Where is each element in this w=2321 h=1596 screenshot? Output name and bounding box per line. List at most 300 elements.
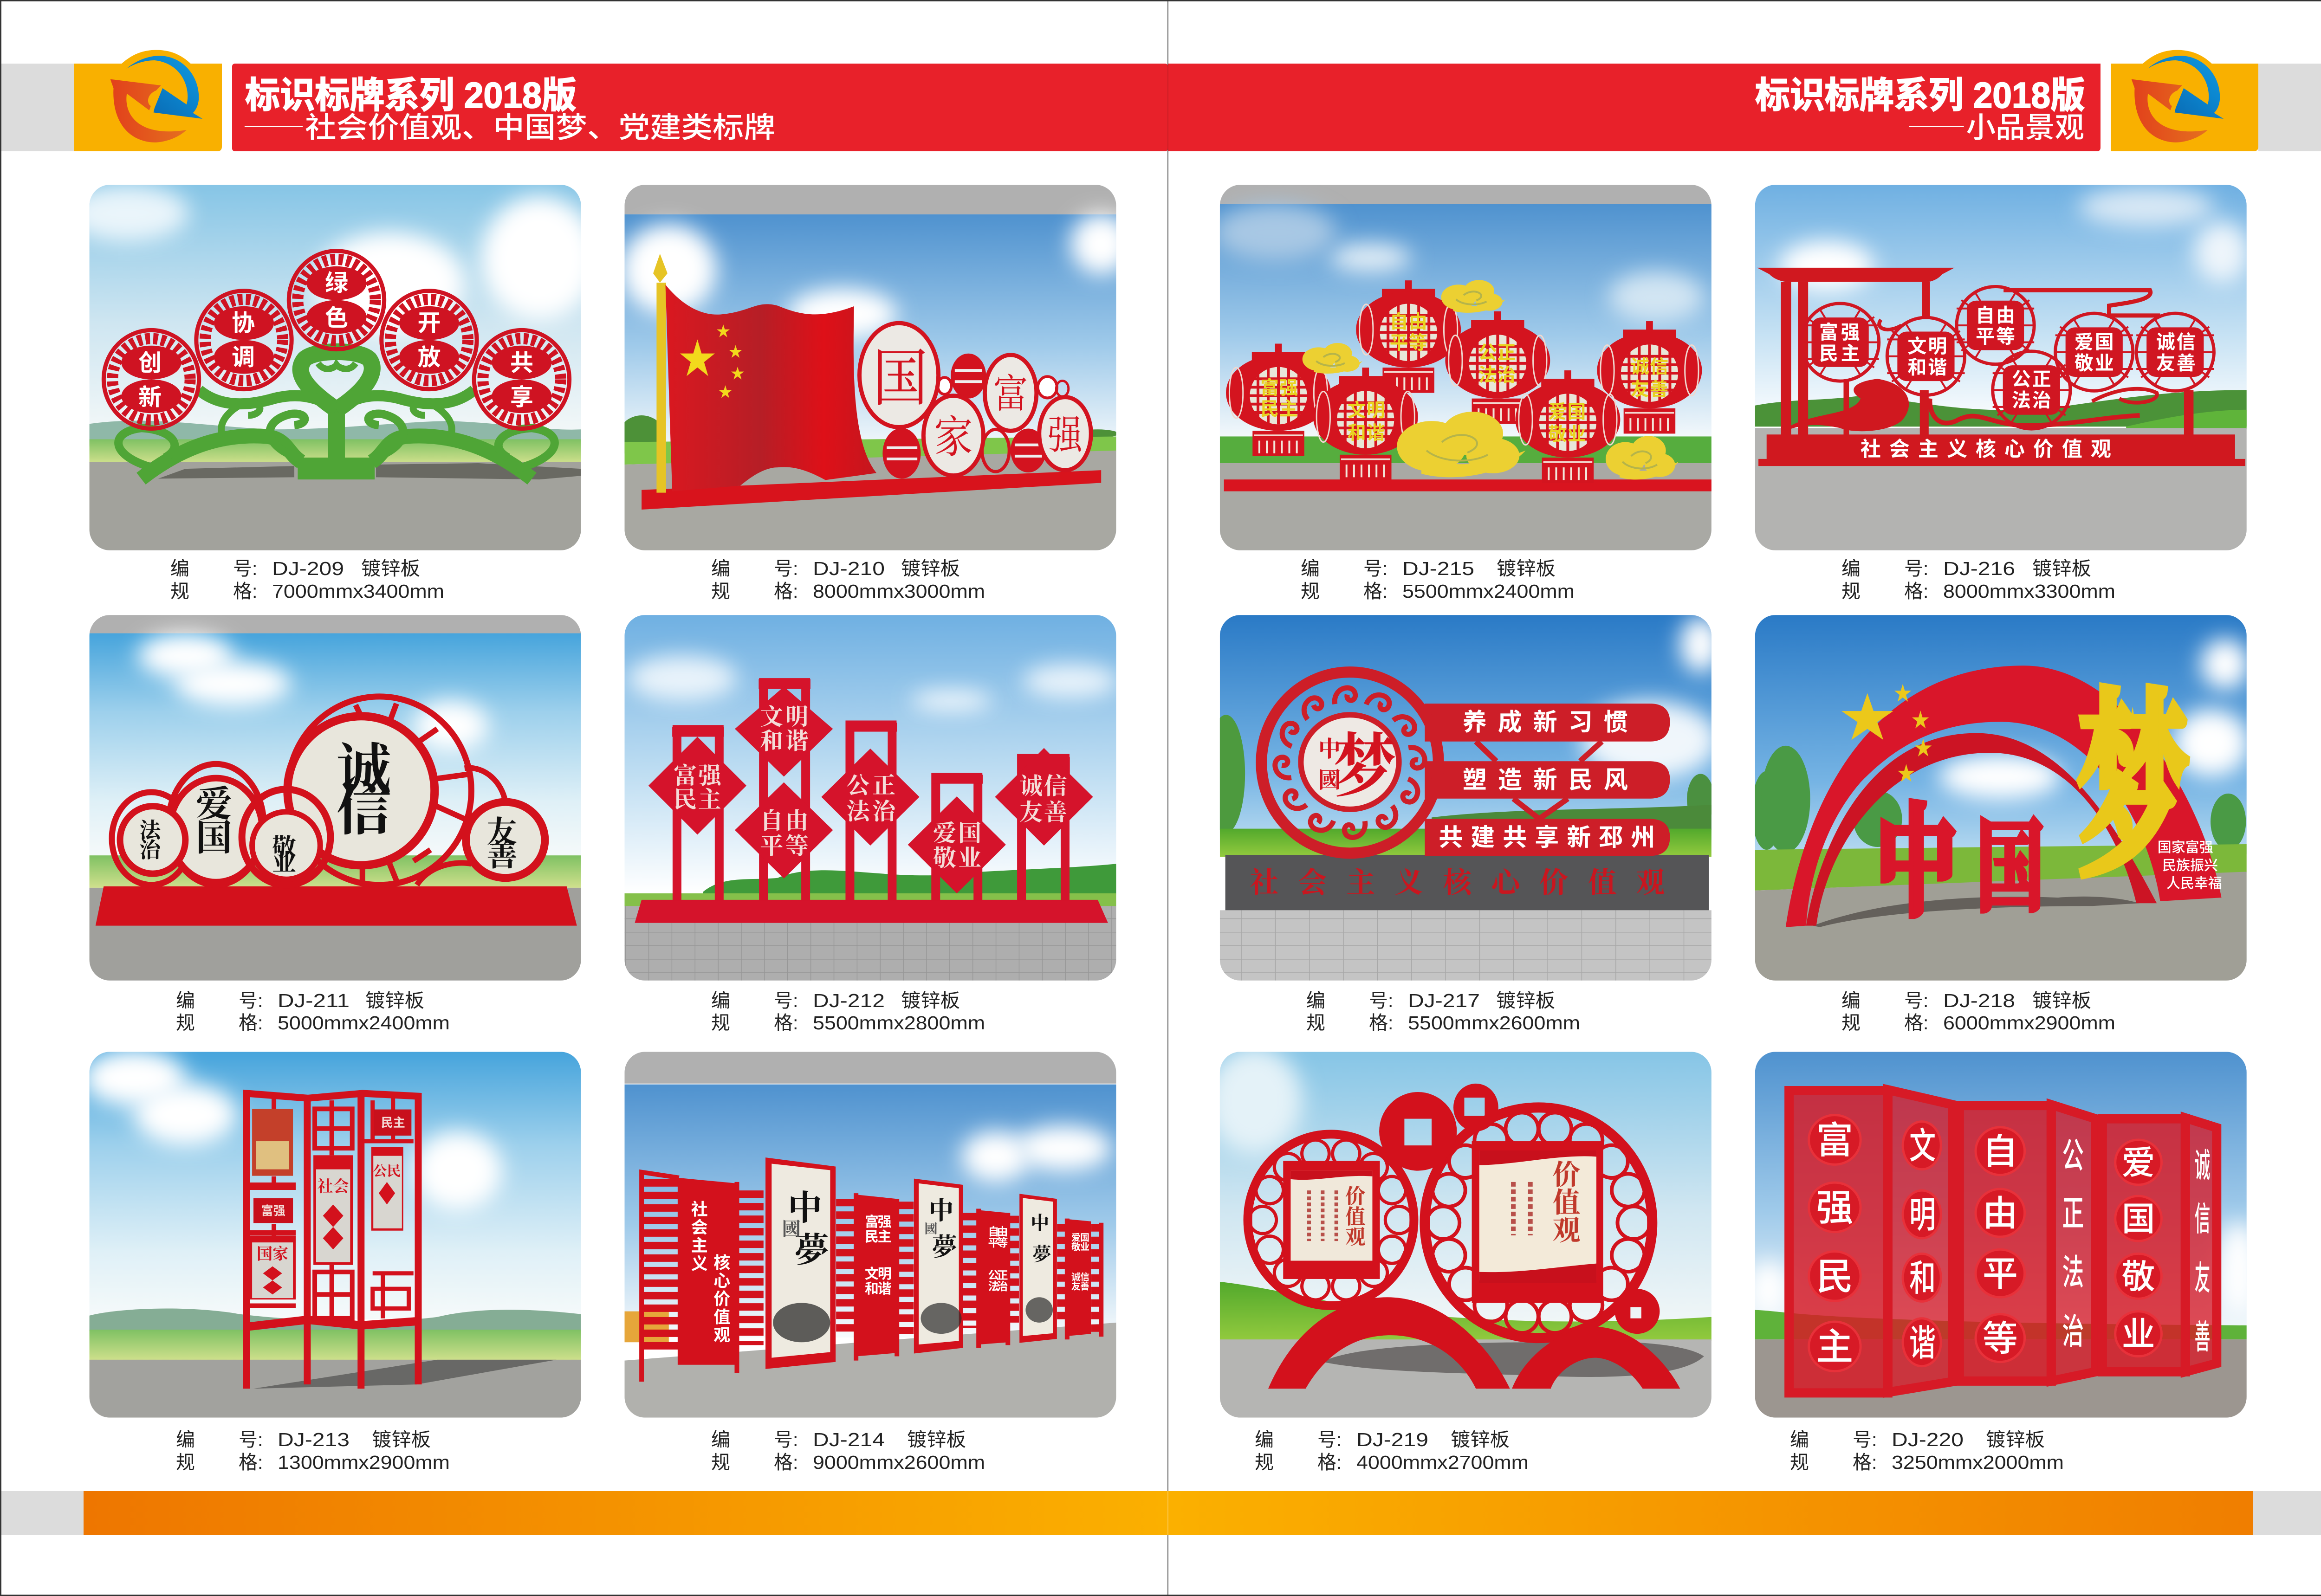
caption DJ-211 — [176, 990, 450, 1034]
diamond characters: 民 — [674, 781, 697, 814]
gate frame — [1757, 268, 2193, 435]
caption DJ-216: 编 — [1841, 558, 1861, 579]
caption DJ-213: 镀锌板 — [372, 1429, 431, 1450]
left header band — [1, 50, 1168, 151]
lattice medallions: 自 — [1976, 299, 1995, 327]
caption DJ-212: 5500mmx2800mm — [813, 1012, 985, 1034]
caption DJ-215: 号: — [1363, 558, 1387, 579]
round emblem: 國 — [1318, 762, 1341, 794]
panel: DJ-216 core values gate sign — [1755, 185, 2249, 550]
screen characters — [1816, 1111, 2210, 1371]
sign tile: rich strong: 富强 — [261, 1202, 285, 1219]
diamond characters: 善 — [1044, 794, 1067, 827]
ink scrolls: 國 — [782, 1214, 801, 1241]
round discs: 爱 — [195, 775, 232, 827]
medallions — [104, 251, 570, 428]
outer arch — [1786, 666, 2222, 927]
inner arch — [1806, 733, 2157, 926]
caption DJ-214: 镀锌板 — [907, 1429, 966, 1450]
round emblem: 中 — [1318, 731, 1341, 763]
caption DJ-220: 规 — [1790, 1452, 1809, 1473]
screen characters: 和 — [1909, 1249, 1936, 1301]
caption DJ-218: 6000mmx2900mm — [1943, 1012, 2115, 1034]
caption DJ-213: 格: — [239, 1452, 263, 1473]
lattice medallions: 诚 — [2156, 326, 2175, 354]
medallions: 绿 — [325, 265, 348, 298]
lattice medallions: 法 — [2012, 384, 2031, 412]
caption DJ-218: 镀锌板 — [2032, 990, 2091, 1011]
red base — [96, 886, 577, 926]
ink scrolls: 中 — [1031, 1208, 1049, 1235]
caption DJ-213: 1300mmx2900mm — [278, 1452, 450, 1473]
panel: DJ-220 six-fold screen — [1748, 1052, 2259, 1418]
plinth slogan: 社会主义核心价值观 — [1250, 859, 1684, 901]
caption DJ-214: 号: — [774, 1429, 798, 1450]
lattice medallions: 主 — [1841, 337, 1860, 365]
caption DJ-217: 镀锌板 — [1496, 990, 1555, 1011]
caption DJ-219: 编 — [1255, 1429, 1274, 1450]
screen characters: 诚 — [2195, 1139, 2210, 1187]
lattice medallions: 正 — [2032, 363, 2051, 391]
panel: DJ-209 green tree sign — [66, 185, 597, 550]
round discs: 信 — [337, 767, 391, 846]
medallions: 协 — [232, 304, 255, 338]
caption DJ-209: 镀锌板 — [361, 558, 420, 579]
lattice medallions: 敬 — [2075, 347, 2094, 375]
caption DJ-219: 规 — [1255, 1452, 1274, 1473]
caption DJ-216: DJ-216 — [1943, 558, 2015, 579]
lanterns: 和 — [1348, 418, 1366, 445]
red base — [1224, 479, 1712, 491]
lanterns: 善 — [1650, 374, 1668, 401]
banner slogans: 明谐 — [875, 1266, 895, 1296]
lanterns: 爱 — [1548, 396, 1567, 423]
caption DJ-215: 格: — [1363, 581, 1387, 602]
screen characters: 法 — [2062, 1244, 2084, 1295]
caption DJ-214: 规 — [711, 1452, 730, 1473]
round emblems: 强 — [1048, 403, 1083, 460]
sign tile: nation: 国家 — [257, 1241, 288, 1264]
lanterns: 明 — [1367, 395, 1385, 422]
flag stars — [680, 324, 744, 398]
caption DJ-213 — [176, 1429, 450, 1473]
caption DJ-218: 规 — [1841, 1012, 1861, 1034]
caption DJ-217: 格: — [1369, 1012, 1393, 1034]
round discs: 国 — [196, 809, 232, 861]
round discs — [120, 716, 545, 885]
caption DJ-218: 格: — [1904, 1012, 1928, 1034]
lattice rings — [112, 697, 506, 885]
red base — [642, 470, 1101, 510]
diamond characters: 和 — [760, 723, 783, 756]
sign tile: citizen: 公民 — [373, 1159, 401, 1180]
golden clouds — [1303, 280, 1679, 479]
screen characters: 富 — [1816, 1111, 1853, 1164]
diamond characters: 谐 — [785, 723, 809, 756]
diamond characters: 文 — [760, 698, 783, 731]
diamond characters: 法 — [847, 793, 872, 826]
arches — [1268, 1297, 1680, 1389]
sign tile: society: 社会 — [318, 1174, 349, 1196]
caption DJ-215: 5500mmx2400mm — [1402, 581, 1575, 602]
caption DJ-216 — [1841, 558, 2115, 602]
lattice medallions: 明 — [1928, 330, 1947, 358]
sign tile: rich strong — [253, 1198, 293, 1223]
panel: DJ-219 coin ring sign — [1207, 1047, 1712, 1418]
diamond characters: 主 — [698, 781, 721, 814]
medallions: 共 — [510, 344, 533, 378]
bar slogans: 共建共享新邳州 — [1439, 818, 1663, 853]
lattice medallions: 强 — [1841, 317, 1860, 344]
red characters: 国 — [1977, 788, 2044, 931]
lanterns: 民 — [1260, 394, 1279, 420]
fret columns — [660, 1179, 1096, 1350]
caption DJ-220: 编 — [1790, 1429, 1809, 1450]
lattice medallions: 谐 — [1928, 352, 1947, 380]
screen characters: 正 — [2062, 1185, 2084, 1236]
banner slogans: 富民 — [862, 1215, 882, 1244]
left poster: 价值观 — [1341, 1185, 1370, 1247]
caption DJ-213: 号: — [239, 1429, 263, 1450]
sign tile: nation — [250, 1235, 296, 1299]
caption DJ-216: 格: — [1904, 581, 1928, 602]
poster — [252, 1109, 293, 1176]
sign tile: society — [313, 1155, 353, 1265]
caption DJ-217: DJ-217 — [1408, 990, 1480, 1011]
caption DJ-211: 编 — [176, 990, 195, 1011]
left ring — [1248, 1134, 1414, 1305]
diamond characters: 友 — [1019, 794, 1043, 827]
lanterns: 业 — [1567, 419, 1586, 446]
caption DJ-215: 规 — [1301, 581, 1320, 602]
caption DJ-220: 3250mmx2000mm — [1892, 1452, 2064, 1473]
medallions: 放 — [417, 339, 441, 372]
screen frame — [246, 1093, 418, 1389]
caption DJ-216: 规 — [1841, 581, 1861, 602]
round discs: 善 — [486, 831, 517, 875]
caption DJ-211: DJ-211 — [278, 990, 350, 1011]
diamond characters: 强 — [698, 757, 723, 791]
screen characters: 等 — [1983, 1310, 2018, 1361]
caption DJ-220: 格: — [1853, 1452, 1877, 1473]
banner slogans: 核心价值观 — [710, 1254, 734, 1344]
lattice medallions: 国 — [2095, 326, 2114, 354]
medallions: 新 — [138, 379, 162, 412]
panel: DJ-213 folding screen sign — [83, 1050, 581, 1418]
caption DJ-218 — [1841, 990, 2115, 1034]
caption DJ-219: 格: — [1317, 1452, 1342, 1473]
diamond characters — [674, 698, 1067, 873]
lanterns: 自 — [1390, 306, 1408, 333]
round discs: 业 — [272, 843, 296, 878]
caption DJ-210: 格: — [774, 581, 798, 602]
caption DJ-212: 号: — [774, 990, 798, 1011]
caption DJ-209: 号: — [233, 558, 257, 579]
caption DJ-209: 规 — [170, 581, 189, 602]
medallions: 创 — [138, 344, 162, 378]
lanterns: 谐 — [1367, 418, 1385, 445]
lanterns: 治 — [1497, 360, 1516, 387]
diamond characters: 公 — [847, 767, 870, 801]
medallions: 开 — [417, 304, 441, 338]
medallions: 调 — [232, 339, 255, 372]
caption DJ-212: 镀锌板 — [901, 990, 960, 1011]
lanterns: 信 — [1650, 351, 1668, 378]
red banners — [678, 1178, 1091, 1365]
screen characters: 公 — [2062, 1128, 2084, 1179]
caption DJ-220: 镀锌板 — [1986, 1429, 2045, 1450]
screen characters: 平 — [1983, 1245, 2018, 1296]
lanterns: 国 — [1567, 396, 1586, 423]
diamond characters: 等 — [785, 827, 809, 861]
lanterns: 正 — [1497, 337, 1516, 364]
lattice medallions: 民 — [1819, 337, 1838, 365]
round discs: 治 — [139, 834, 162, 864]
bar slogans: 塑造新民风 — [1463, 760, 1639, 795]
banner slogans: 自平 — [985, 1226, 1002, 1248]
lanterns: 强 — [1279, 373, 1298, 400]
diamonds — [648, 687, 1093, 893]
red characters: 中 — [1876, 766, 1957, 939]
shadow — [158, 463, 581, 479]
caption DJ-216: 8000mmx3300mm — [1943, 581, 2115, 602]
screen characters: 文 — [1909, 1117, 1936, 1169]
screen characters: 自 — [1983, 1123, 2018, 1174]
lanterns: 富 — [1260, 373, 1279, 400]
diamond characters: 业 — [958, 840, 981, 873]
screen characters: 由 — [1983, 1185, 2018, 1236]
screen characters: 明 — [1909, 1186, 1936, 1238]
ink scrolls: 中 — [788, 1181, 822, 1230]
panel: DJ-214 banner row sign — [624, 1052, 1116, 1418]
caption DJ-209: DJ-209 — [272, 558, 344, 579]
ink scrolls: 夢 — [932, 1228, 957, 1263]
screen characters: 民 — [1816, 1247, 1853, 1301]
lanterns: 敬 — [1548, 419, 1567, 446]
lattice medallions: 公 — [2012, 363, 2031, 391]
left poster — [1283, 1161, 1380, 1279]
column caps — [672, 679, 1070, 788]
caption DJ-219: DJ-219 — [1356, 1429, 1428, 1450]
sign tile: democracy — [374, 1110, 411, 1136]
screen characters: 业 — [2122, 1307, 2155, 1356]
diamond characters: 诚 — [1019, 768, 1043, 801]
caption DJ-211: 5000mmx2400mm — [278, 1012, 450, 1034]
caption DJ-218: 编 — [1841, 990, 1861, 1011]
lattice medallions: 治 — [2032, 384, 2051, 412]
banner slogans: 文和 — [862, 1266, 882, 1296]
banner slogans: 正治 — [994, 1269, 1011, 1292]
header subtitle right: ——小品景观 — [1907, 104, 2084, 146]
posts — [642, 1172, 1101, 1382]
right ring — [1425, 1107, 1652, 1338]
ink scrolls: 中 — [929, 1191, 954, 1227]
caption DJ-213: 编 — [176, 1429, 195, 1450]
lanterns: 主 — [1279, 394, 1298, 420]
right header band — [1168, 50, 2321, 151]
wave swoosh — [1789, 379, 1909, 431]
footer band — [1, 1491, 2321, 1535]
caption DJ-211: 格: — [239, 1012, 263, 1034]
bars — [1425, 704, 1670, 856]
caption DJ-209: 编 — [170, 558, 189, 579]
diamond characters: 正 — [872, 767, 895, 801]
diamond characters: 明 — [785, 698, 809, 731]
lattice medallions: 业 — [2095, 347, 2114, 375]
ink scrolls: 夢 — [1033, 1240, 1051, 1266]
caption DJ-219: 号: — [1317, 1429, 1342, 1450]
banner slogans: 国业 — [1078, 1233, 1091, 1251]
caption DJ-210: DJ-210 — [813, 558, 885, 579]
bar slogans: 养成新习惯 — [1463, 703, 1639, 737]
yellow dream character: 梦 — [2076, 628, 2190, 914]
screen characters: 敬 — [2122, 1249, 2155, 1298]
diamond characters: 平 — [760, 827, 783, 861]
lattice medallions: 平 — [1976, 321, 1995, 349]
caption DJ-209 — [170, 558, 444, 602]
round discs: 诚 — [337, 725, 391, 804]
diamond characters: 敬 — [933, 840, 956, 873]
green tree frame — [118, 352, 555, 479]
plate text — [2158, 836, 2222, 892]
column frames — [677, 683, 1065, 900]
screen frames — [1789, 1090, 2217, 1393]
shadow — [1323, 1341, 1704, 1377]
caption DJ-214 — [711, 1429, 985, 1473]
lanterns: 法 — [1478, 360, 1497, 387]
banner slogans: 由等 — [994, 1226, 1011, 1248]
round emblems: 家 — [934, 401, 973, 465]
scroll ornaments — [1879, 290, 2160, 426]
header title right: 标识标牌系列 2018版 — [1755, 75, 2085, 116]
lanterns — [1226, 280, 1702, 483]
logo: left — [110, 50, 202, 142]
caption DJ-217 — [1306, 990, 1580, 1034]
lanterns: 文 — [1348, 395, 1366, 422]
lattice medallions: 文 — [1907, 330, 1926, 358]
screen characters: 善 — [2195, 1311, 2210, 1359]
screen characters: 强 — [1816, 1178, 1853, 1232]
banner slogans — [687, 1200, 1091, 1344]
lanterns: 由 — [1409, 306, 1427, 333]
caption DJ-210: 编 — [711, 558, 730, 579]
caption DJ-214: DJ-214 — [813, 1429, 885, 1450]
ink scrolls: 國 — [924, 1219, 938, 1237]
screen characters: 爱 — [2122, 1135, 2155, 1184]
plate text: 国家富强 — [2158, 836, 2213, 856]
caption DJ-217: 号: — [1369, 990, 1393, 1011]
lattice medallions: 和 — [1907, 352, 1926, 380]
lattice medallions: 富 — [1819, 317, 1838, 344]
diamond characters: 富 — [674, 757, 697, 791]
caption DJ-218: 号: — [1904, 990, 1928, 1011]
caption DJ-216: 镀锌板 — [2032, 558, 2091, 579]
caption DJ-212: 规 — [711, 1012, 730, 1034]
medallions: 享 — [510, 379, 533, 412]
diamond characters: 由 — [785, 802, 809, 835]
caption DJ-219 — [1255, 1429, 1529, 1473]
round emblem — [1261, 672, 1439, 853]
screen characters: 主 — [1816, 1317, 1853, 1371]
flag — [665, 284, 876, 491]
shadow — [253, 1360, 557, 1389]
lanterns: 诚 — [1631, 351, 1649, 378]
sign tile: democracy: 民主 — [381, 1113, 405, 1131]
caption DJ-218: DJ-218 — [1943, 990, 2015, 1011]
dark plinth — [1225, 855, 1709, 910]
logo: right — [2132, 50, 2224, 142]
stars — [1841, 684, 1932, 782]
caption DJ-217: 编 — [1306, 990, 1325, 1011]
caption DJ-216: 号: — [1904, 558, 1928, 579]
caption DJ-220: DJ-220 — [1892, 1429, 1964, 1450]
lattice medallions: 由 — [1996, 299, 2015, 327]
bar connectors — [1476, 742, 1602, 819]
caption DJ-209: 格: — [233, 581, 257, 602]
caption DJ-210: 号: — [774, 558, 798, 579]
caption DJ-215 — [1301, 558, 1575, 602]
lanterns: 友 — [1631, 374, 1649, 401]
caption DJ-219: 镀锌板 — [1451, 1429, 1510, 1450]
arch shadow — [1813, 897, 2140, 927]
banner slogans: 信善 — [1078, 1272, 1091, 1291]
round emblems — [859, 323, 1091, 478]
caption DJ-220 — [1790, 1429, 2064, 1473]
red characters — [1876, 766, 2044, 939]
caption DJ-210: 8000mmx3000mm — [813, 581, 985, 602]
lattice medallions: 善 — [2177, 347, 2196, 375]
medallions — [1809, 1115, 2161, 1371]
caption DJ-219: 4000mmx2700mm — [1356, 1452, 1529, 1473]
caption DJ-213: 规 — [176, 1452, 195, 1473]
ink scrolls: 夢 — [795, 1223, 829, 1272]
plate text: 民族振兴 — [2162, 854, 2218, 874]
caption DJ-211: 规 — [176, 1012, 195, 1034]
caption DJ-215: 编 — [1301, 558, 1320, 579]
base slogan: 社会主义核心价值观 — [1861, 432, 2120, 462]
panel: DJ-218 Chinese dream arch — [1751, 615, 2249, 981]
caption DJ-211: 号: — [239, 990, 263, 1011]
round discs: 敬 — [272, 828, 296, 863]
banner slogans: 公法 — [985, 1269, 1002, 1292]
panel: DJ-217 Chinese dream round sign — [1207, 615, 1721, 981]
ink scrolls — [765, 1157, 1057, 1369]
screen characters: 信 — [2195, 1193, 2210, 1241]
caption DJ-210 — [711, 558, 985, 602]
caption DJ-209: 7000mmx3400mm — [272, 581, 444, 602]
header subtitle left: ——社会价值观、中国梦、党建类标牌 — [242, 104, 775, 146]
diamond characters: 信 — [1044, 768, 1067, 801]
coins — [1379, 1084, 1660, 1334]
caption DJ-212: DJ-212 — [813, 990, 885, 1011]
panel: DJ-211 round calligraphy sign — [90, 615, 581, 981]
lanterns: 公 — [1478, 337, 1497, 364]
caption DJ-214: 9000mmx2600mm — [813, 1452, 985, 1473]
diamond characters: 治 — [872, 793, 897, 826]
caption DJ-214: 格: — [774, 1452, 798, 1473]
caption DJ-210: 镀锌板 — [901, 558, 960, 579]
screen characters: 国 — [2122, 1192, 2155, 1241]
round emblems: 国 — [873, 329, 928, 418]
panel: DJ-210 national flag sign — [618, 185, 1132, 550]
lanterns: 平 — [1390, 328, 1408, 355]
lattice medallions: 友 — [2156, 347, 2175, 375]
banner slogans: 社会主义 — [687, 1200, 712, 1273]
right poster: 价值观 — [1546, 1160, 1586, 1243]
caption DJ-220: 号: — [1853, 1429, 1877, 1450]
panel: DJ-215 lantern sign — [1214, 185, 1712, 550]
round emblems: 富 — [993, 362, 1028, 419]
